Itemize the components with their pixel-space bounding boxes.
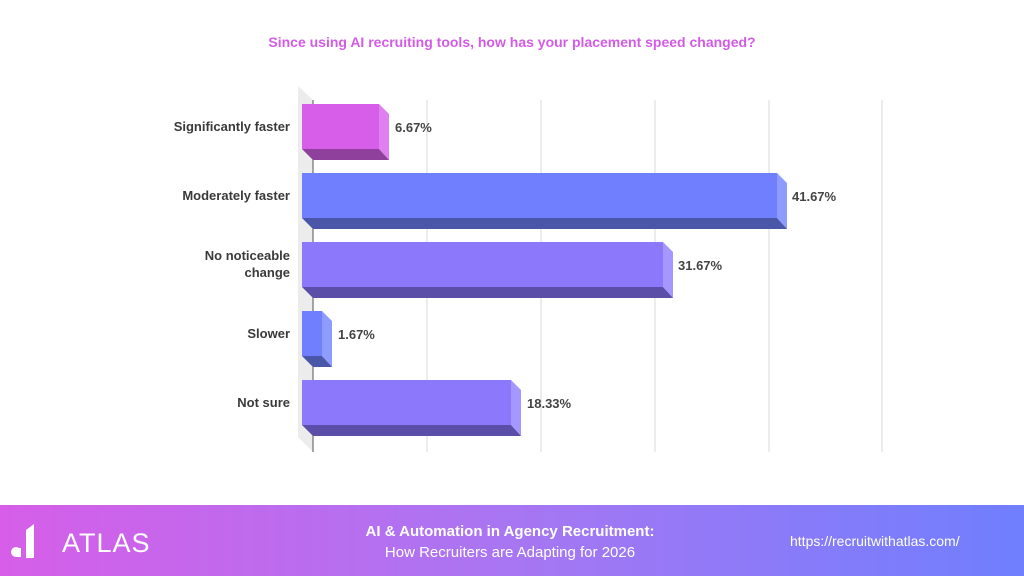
bar: Not sure: [302, 380, 572, 436]
category labels: Slower: [247, 326, 290, 341]
footer title: How Recruiters are Adapting for 2026: [385, 544, 635, 561]
bar: No noticeable change: [302, 242, 723, 298]
bar: Significantly faster: 6.67%: [395, 120, 432, 135]
category labels: No noticeable: [205, 248, 290, 263]
bar: No noticeable change: 31.67%: [678, 258, 723, 273]
logo: [11, 524, 151, 558]
footer title: AI & Automation in Agency Recruitment:: [366, 523, 654, 540]
icon: atlas logo: [11, 524, 34, 558]
bar: Moderately faster: [302, 173, 837, 229]
footer title: [366, 523, 654, 561]
chart wall: [298, 86, 313, 452]
category labels: Significantly faster: [174, 119, 290, 134]
bar: Significantly faster: [302, 104, 432, 160]
title: Since using AI recruiting tools, how has your placement speed changed?: [268, 34, 756, 50]
bar: Slower: [302, 311, 375, 367]
url: https://recruitwithatlas.com/: [790, 533, 960, 549]
category labels: Not sure: [237, 395, 290, 410]
category labels: Moderately faster: [182, 188, 290, 203]
bar: Not sure: 18.33%: [527, 396, 572, 411]
logo: ATLAS: [62, 528, 151, 558]
bar: Moderately faster: 41.67%: [792, 189, 837, 204]
category labels: [174, 119, 290, 410]
category labels: change: [244, 265, 290, 280]
bar: Slower: 1.67%: [338, 327, 375, 342]
footer: [0, 505, 1024, 576]
